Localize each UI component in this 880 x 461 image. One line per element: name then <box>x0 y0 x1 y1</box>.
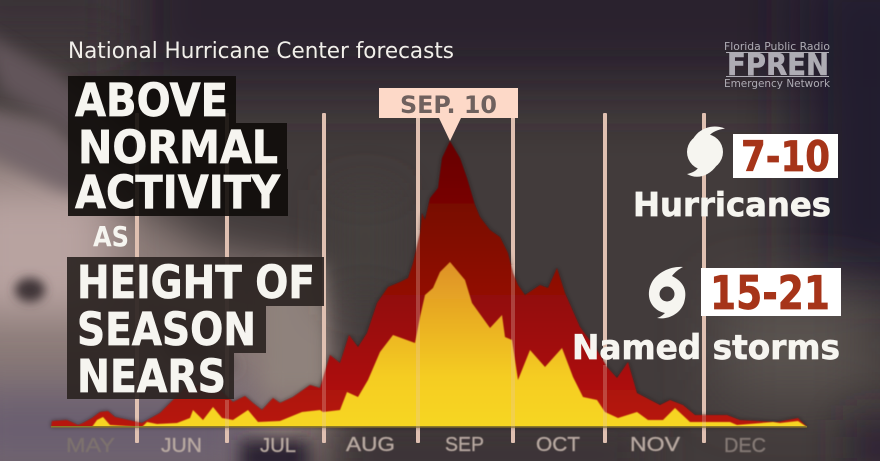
subheading: National Hurricane Center forecasts <box>68 39 454 64</box>
month labels: JUL <box>260 435 296 457</box>
month labels: NOV <box>630 434 681 456</box>
FPREN logo: FPREN <box>727 48 829 83</box>
peak date marker: SEP. 10 <box>400 91 497 119</box>
connector word: AS <box>93 220 129 253</box>
stat: named storms: 15-21 <box>710 266 830 320</box>
month labels: MAY <box>66 435 115 457</box>
storm eye <box>15 278 45 302</box>
headline: above normal activity: NORMAL <box>78 121 278 174</box>
month labels: JUN <box>161 435 202 457</box>
month labels: AUG <box>346 434 395 456</box>
headline: height of season nears: NEARS <box>77 350 226 403</box>
FPREN logo: Emergency Network <box>724 77 831 90</box>
month labels <box>66 434 766 457</box>
icon: hurricane symbol <box>687 127 725 177</box>
stat: named storms: Named storms <box>572 328 840 368</box>
stat: hurricanes: Hurricanes <box>633 185 831 224</box>
month labels: DEC <box>724 435 766 457</box>
headline: height of season nears: SEASON <box>77 303 256 356</box>
stat: hurricanes: 7-10 <box>741 132 830 181</box>
FPREN logo <box>724 40 831 90</box>
month gridlines <box>135 113 706 443</box>
headline: height of season nears: HEIGHT OF <box>77 256 315 309</box>
stat: hurricanes <box>633 132 838 224</box>
area chart: storm activity by date <box>51 141 807 428</box>
month labels: OCT <box>536 434 580 456</box>
icon: named storm symbol <box>649 267 685 318</box>
month labels: SEP <box>445 434 484 456</box>
headline: height of season nears <box>67 256 324 403</box>
FPREN logo: Florida Public Radio <box>724 40 830 53</box>
headline: above normal activity: ABOVE <box>75 74 228 127</box>
headline: above normal activity <box>68 74 288 219</box>
stat: named storms <box>572 266 841 368</box>
headline: above normal activity: ACTIVITY <box>75 166 281 219</box>
peak date marker <box>379 88 518 141</box>
